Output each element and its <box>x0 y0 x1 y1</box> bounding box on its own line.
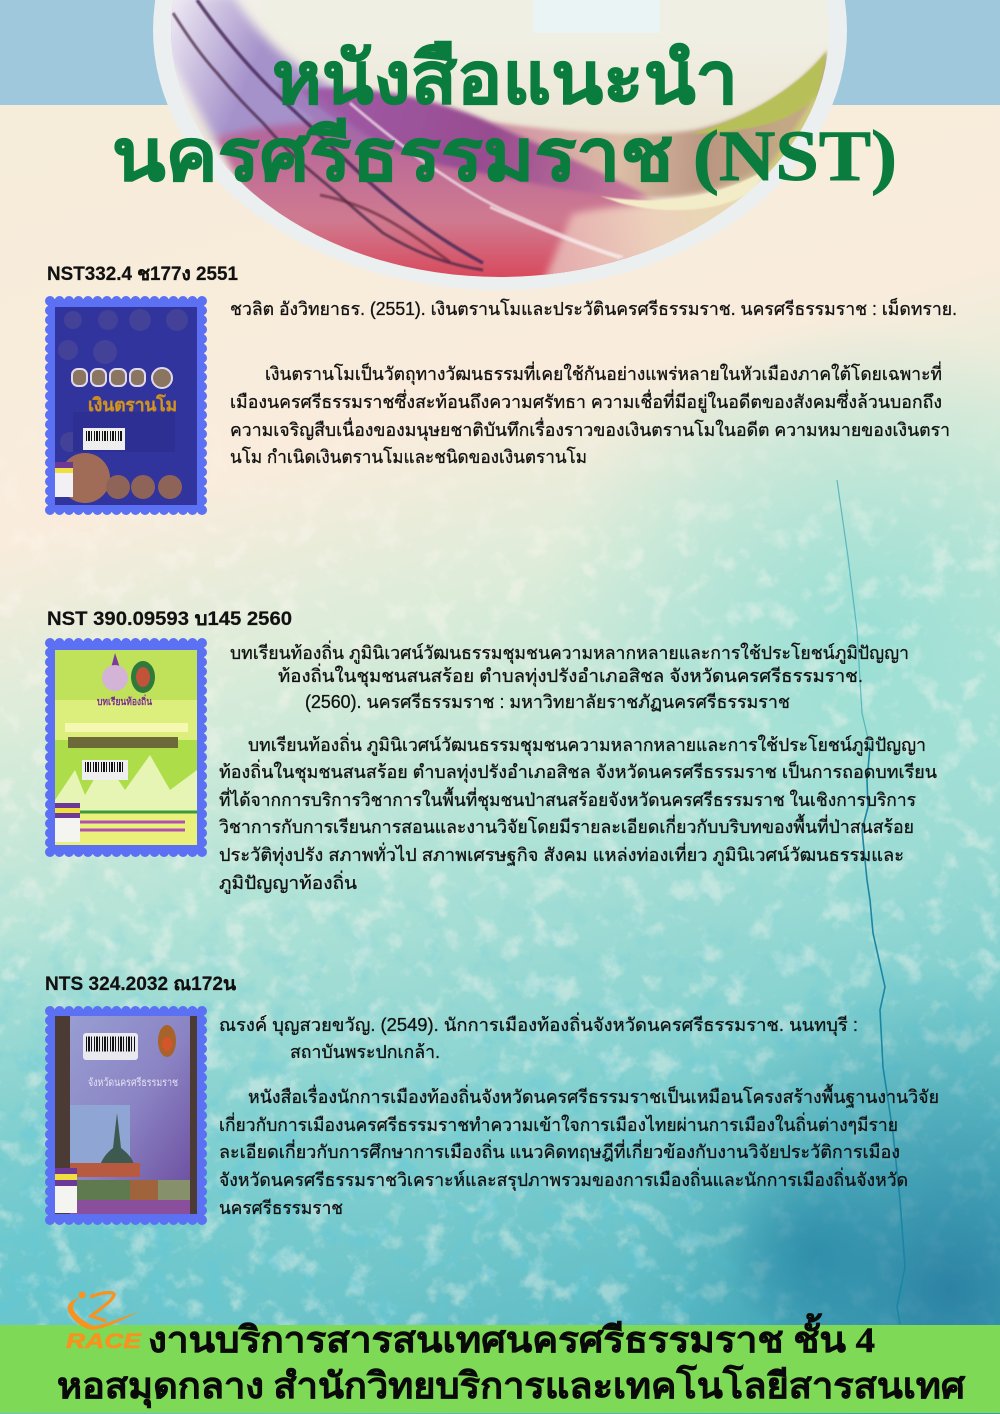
citation 2: ท้องถิ่นในชุมชนสนสร้อย ตำบลทุ่งปรังอำเภอสิชล จังหวัดนครศรีธรรมราช. <box>278 663 863 687</box>
top blue band <box>0 0 1000 105</box>
citation 2: บทเรียนท้องถิ่น ภูมินิเวศน์วัฒนธรรมชุมชนความหลากหลายและการใช้ประโยชน์ภูมิปัญญา <box>230 640 909 664</box>
icon: RACE logo <box>66 1292 142 1353</box>
summary 1: นโม กำเนิดเงินตรานโมและชนิดของเงินตรานโม <box>230 446 587 467</box>
call number 2: NST 390.09593 บ145 2560 <box>47 609 292 630</box>
icon: RACE logo: RACE <box>66 1330 142 1353</box>
panel: book 3 <box>45 974 939 1222</box>
summary 3: จังหวัดนครศรีธรรมราชวิเคราะห์และสรุปภาพรวมของการเมืองถิ่นและนักการเมืองถิ่นจังหวัด <box>219 1167 908 1191</box>
summary 1: เมืองนครศรีธรรมราชซึ่งสะท้อนถึงความศรัทธา ความเชื่อที่มีอยู่ในอดีตของสังคมซึ่งล้วนบอกถึง <box>230 389 942 413</box>
summary 2: ที่ได้จากการบริการวิชาการในพื้นที่ชุมชนป่าสนสร้อยจังหวัดนครศรีธรรมราช ในเชิงการบริการ <box>219 787 916 811</box>
footer band <box>0 1313 1000 1413</box>
summary 3: นครศรีธรรมราช <box>219 1198 343 1218</box>
summary 1: เงินตรานโมเป็นวัตถุทางวัฒนธรรมที่เคยใช้กันอย่างแพร่หลายในหัวเมืองภาคใต้โดยเฉพาะที่ <box>265 361 942 385</box>
footer text: งานบริการสารสนเทศนครศรีธรรมราช ชั้น 4 <box>148 1313 875 1360</box>
citation 3: ณรงค์ บุญสวยขวัญ. (2549). นักการเมืองท้องถิ่นจังหวัดนครศรีธรรมราช. นนทบุรี : <box>219 1012 858 1036</box>
title: นครศรีธรรมราช (NST) <box>112 116 897 196</box>
summary 2: ภูมิปัญญาท้องถิ่น <box>219 870 357 894</box>
citation 2 <box>230 640 909 712</box>
citation 3 <box>219 1012 858 1062</box>
title <box>112 39 897 196</box>
cover title 1: เงินตรานโม <box>88 394 177 415</box>
panel: book 1 <box>47 264 957 512</box>
summary 2 <box>219 732 937 894</box>
summary 2: ท้องถิ่นในชุมชนสนสร้อย ตำบลทุ่งปรังอำเภอสิชล จังหวัดนครศรีธรรมราช เป็นการถอดบทเรียน <box>219 759 937 783</box>
panel: book 2 <box>47 609 937 894</box>
cover title 2: บทเรียนท้องถิ่น <box>97 694 152 708</box>
call number 3: NTS 324.2032 ณ172น <box>45 974 236 995</box>
book cover 3 <box>48 1009 204 1222</box>
call number 1: NST332.4 ช177ง 2551 <box>47 264 238 285</box>
summary 3: เกี่ยวกับการเมืองนครศรีธรรมราชทำความเข้าใจการเมืองไทยผ่านการเมืองในถิ่นต่างๆมีราย <box>219 1112 898 1135</box>
book cover 1 <box>48 299 204 512</box>
decorative oval with purple and red swooshes <box>153 0 847 300</box>
cover title 3: จังหวัดนครศรีธรรมราช <box>88 1076 178 1089</box>
summary 1 <box>230 361 950 467</box>
summary 3 <box>219 1084 939 1218</box>
summary 3: ละเอียดเกี่ยวกับการศึกษาการเมืองถิ่น แนวคิดทฤษฎีที่เกี่ยวข้องกับงานวิจัยประวัติการเมือง <box>219 1139 900 1162</box>
citation 3: สถาบันพระปกเกล้า. <box>290 1042 440 1062</box>
footer text: หอสมุดกลาง สำนักวิทยบริการและเทคโนโลยีสารสนเทศ <box>57 1364 966 1409</box>
summary 2: วิชาการกับการเรียนการสอนและงานวิจัยโดยมีรายละเอียดเกี่ยวกับบริบทของพื้นที่ป่าสนสร้อย <box>219 814 914 837</box>
summary 2: บทเรียนท้องถิ่น ภูมินิเวศน์วัฒนธรรมชุมชนความหลากหลายและการใช้ประโยชน์ภูมิปัญญา <box>248 732 926 756</box>
summary 2: ประวัติทุ่งปรัง สภาพทั่วไป สภาพเศรษฐกิจ สังคม แหล่งท่องเที่ยว ภูมินิเวศน์วัฒนธรรมและ <box>219 842 904 866</box>
title: หนังสือแนะนำ <box>272 39 738 119</box>
book cover 2 <box>48 641 204 854</box>
footer text <box>57 1313 966 1409</box>
summary 1: ความเจริญสืบเนื่องของมนุษยชาติบันทึกเรื่องราวของเงินตรานโมในอดีต ความหมายของเงินตรา <box>230 417 950 441</box>
citation 1: ชวลิต อังวิทยาธร. (2551). เงินตรานโมและประวัตินครศรีธรรมราช. นครศรีธรรมราช : เม็ดทราย. <box>230 297 957 319</box>
summary 3: หนังสือเรื่องนักการเมืองท้องถิ่นจังหวัดนครศรีธรรมราชเป็นเหมือนโครงสร้างพื้นฐานงานวิจัย <box>248 1084 939 1108</box>
citation 2: (2560). นครศรีธรรมราช : มหาวิทยาลัยราชภัฏนครศรีธรรมราช <box>305 692 790 712</box>
